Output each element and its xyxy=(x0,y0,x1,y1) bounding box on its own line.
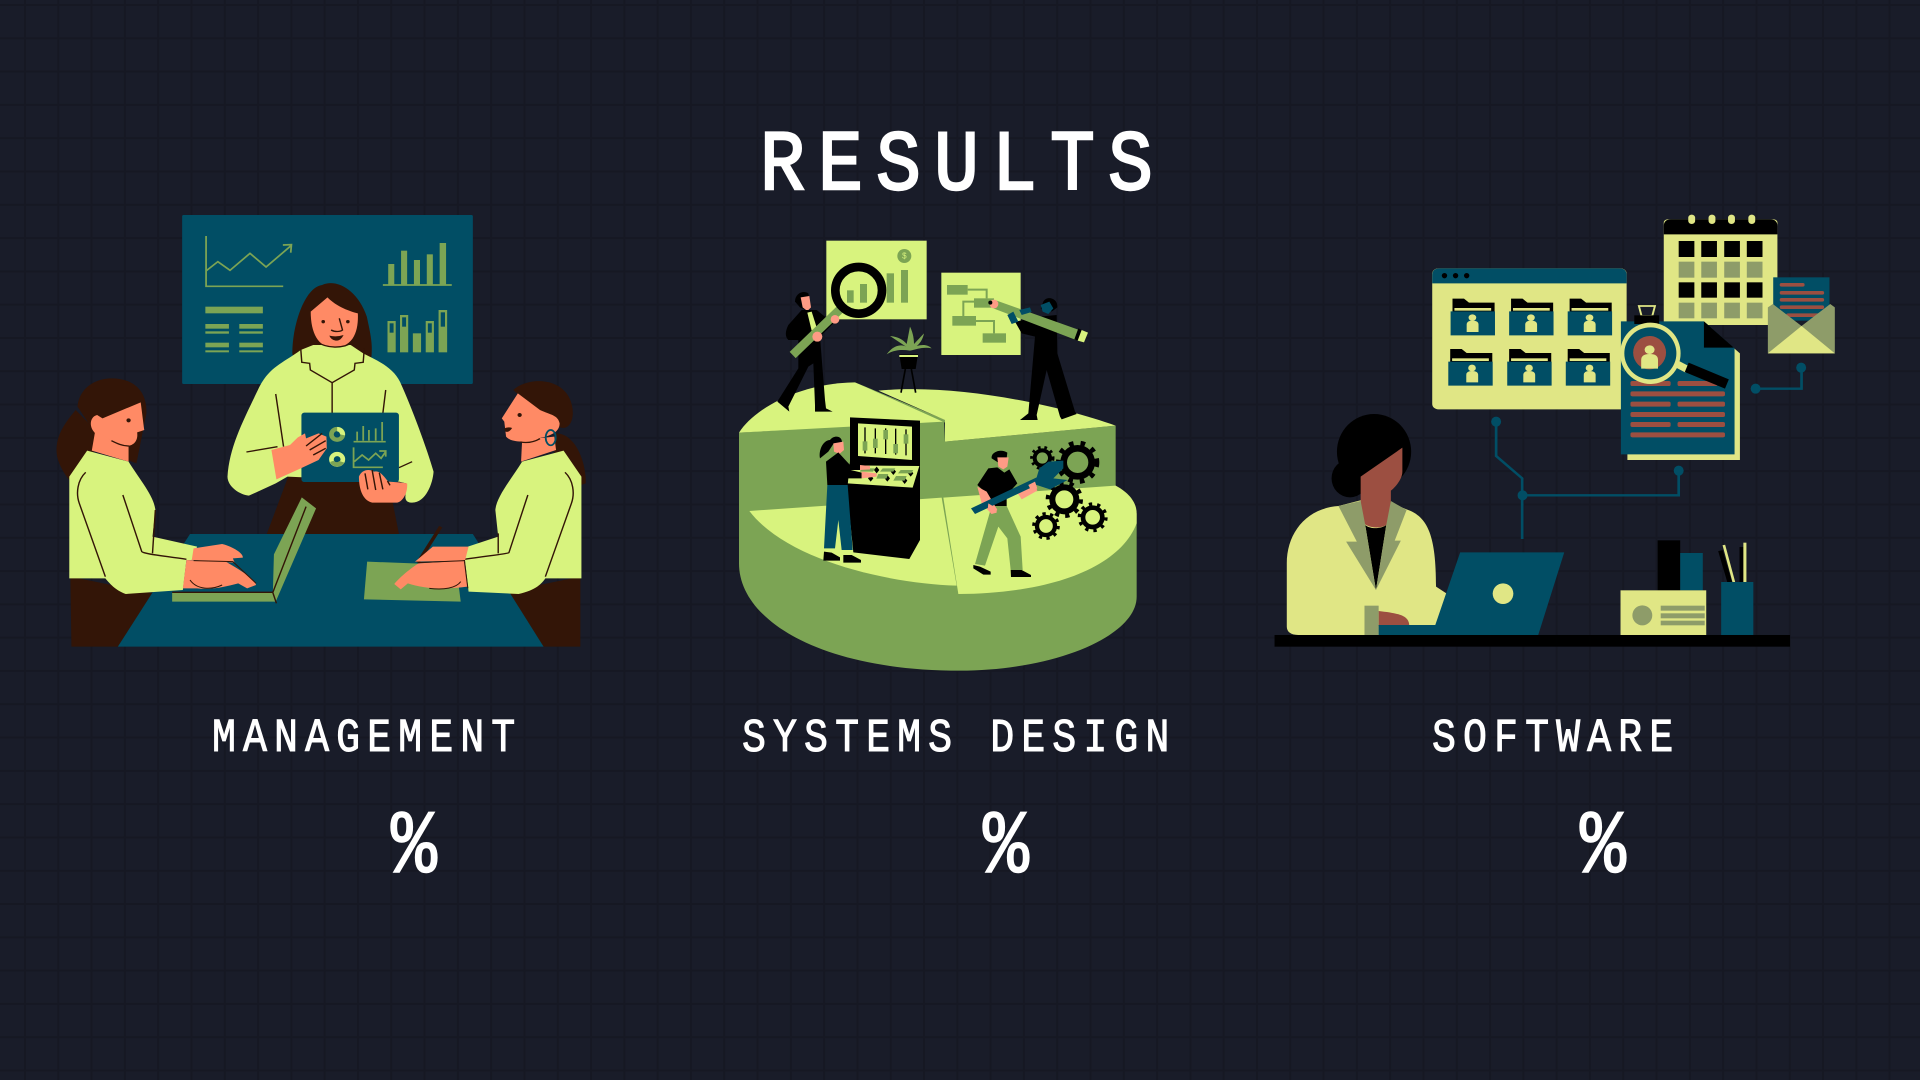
lower bodies and table xyxy=(70,534,580,647)
illustration: management team meeting xyxy=(57,215,586,647)
label: management: MANAGEMENT xyxy=(212,713,522,766)
laptop xyxy=(172,497,316,603)
illustration: software worker at desk xyxy=(1275,215,1835,647)
desk items: books, card holder, pen cup xyxy=(1621,540,1753,635)
folder window xyxy=(1432,268,1627,409)
envelope xyxy=(1768,277,1835,353)
control machine xyxy=(847,417,920,559)
folders grid xyxy=(1448,299,1612,386)
desk xyxy=(1275,635,1790,647)
left woman at laptop xyxy=(57,378,256,594)
standing woman with tablet xyxy=(227,283,434,534)
connector lines xyxy=(1491,363,1806,539)
chart board with magnifier: $ xyxy=(902,252,907,261)
gears xyxy=(1032,443,1106,538)
value: software percent: % xyxy=(1580,798,1626,900)
label: software: SOFTWARE xyxy=(1432,713,1680,766)
illustration: systems design pie xyxy=(739,241,1137,671)
resume document with magnifier xyxy=(1620,306,1740,460)
woman at laptop xyxy=(1287,414,1446,635)
man with wrench xyxy=(971,451,1068,577)
pie chart base xyxy=(739,382,1137,671)
man with pencil xyxy=(988,298,1088,420)
label: systems design: SYSTEMS DESIGN xyxy=(742,713,1176,766)
potted plant xyxy=(887,327,932,393)
value: management percent: % xyxy=(391,798,437,900)
value: systems design percent: % xyxy=(983,798,1029,900)
man with magnifier body xyxy=(777,292,833,412)
chart board with magnifier xyxy=(793,241,927,355)
calendar xyxy=(1664,215,1777,325)
right woman writing xyxy=(394,381,586,594)
woman at machine xyxy=(820,437,877,563)
laptop xyxy=(1379,552,1564,635)
presentation board with charts xyxy=(182,215,473,384)
title: RESULTS xyxy=(760,118,1166,215)
flowchart board xyxy=(941,273,1021,355)
